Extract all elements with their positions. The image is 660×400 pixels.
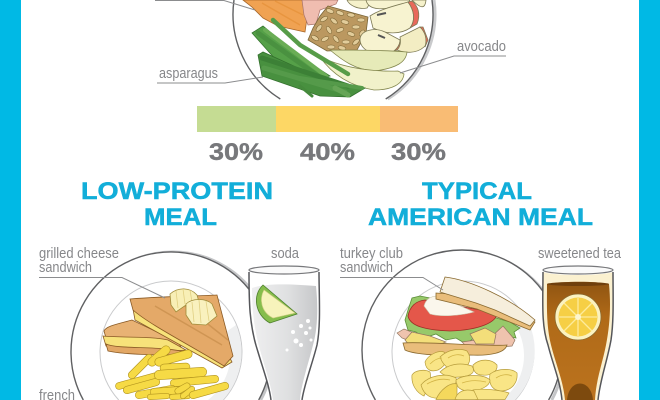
apple slices bbox=[347, 0, 428, 54]
percent: 40: 40% bbox=[300, 139, 355, 166]
asparagus bbox=[252, 20, 365, 97]
turkey club sandwich bbox=[397, 277, 535, 355]
heading: low-protein meal: MEAL bbox=[144, 204, 217, 231]
label: grilled cheese sandwich: grilled cheese bbox=[39, 246, 119, 262]
tea glass bbox=[543, 266, 613, 400]
heading: typical american meal: TYPICAL bbox=[422, 178, 532, 205]
soda bubbles bbox=[286, 319, 312, 352]
label: sweetened tea: sweetened tea bbox=[538, 246, 622, 262]
lemon slice bbox=[555, 294, 601, 340]
top label leader line bbox=[155, 0, 255, 10]
label: turkey club sandwich bbox=[340, 246, 443, 290]
grilled cheese sandwich bbox=[103, 289, 233, 368]
salmon bbox=[243, 0, 307, 32]
segment: yellow bbox=[276, 106, 380, 132]
heading: low-protein meal: LOW-PROTEIN bbox=[81, 178, 273, 205]
grain pile bbox=[308, 6, 368, 51]
high-protein plate illustration bbox=[233, 0, 435, 99]
label: asparagus: asparagus bbox=[159, 66, 218, 82]
percent: 30: 30% bbox=[209, 139, 263, 166]
heading: typical american meal: AMERICAN MEAL bbox=[368, 204, 593, 231]
bottom bread bbox=[403, 343, 507, 355]
label: soda: soda bbox=[271, 246, 300, 262]
lime wedge bbox=[256, 285, 297, 323]
lower sandwich half bbox=[103, 320, 188, 355]
heading: typical american meal bbox=[368, 178, 593, 231]
label: avocado bbox=[400, 39, 506, 73]
segment: orange bbox=[380, 106, 458, 132]
heading: low-protein meal bbox=[81, 178, 273, 231]
left blue side band bbox=[0, 0, 21, 400]
potato chips bbox=[412, 349, 517, 400]
tea base shadow bbox=[567, 384, 593, 400]
tomato bbox=[408, 300, 497, 331]
segment: green bbox=[197, 106, 276, 132]
avocado bbox=[320, 50, 407, 90]
butter curls bbox=[170, 289, 217, 325]
plate rim bbox=[233, 0, 435, 99]
label: turkey club sandwich: turkey club bbox=[340, 246, 403, 262]
right blue side band bbox=[639, 0, 660, 400]
percent: 30: 30% bbox=[391, 139, 446, 166]
mayo bbox=[424, 296, 474, 316]
top bread bbox=[436, 277, 535, 330]
french fries bbox=[119, 350, 225, 397]
soda glass bbox=[249, 266, 320, 400]
lettuce bbox=[405, 296, 520, 344]
label: grilled cheese sandwich bbox=[39, 246, 165, 298]
label: grilled cheese sandwich: sandwich bbox=[39, 260, 92, 276]
low-protein plate bbox=[71, 252, 273, 400]
upper sandwich half bbox=[130, 295, 233, 368]
label: turkey club sandwich: sandwich bbox=[340, 260, 393, 276]
typical american plate bbox=[362, 250, 564, 400]
turkey and cheese bbox=[397, 326, 515, 350]
label: avocado: avocado bbox=[457, 39, 506, 55]
ham bbox=[302, 0, 338, 25]
label: asparagus bbox=[157, 66, 263, 83]
macronutrient bar bbox=[197, 106, 458, 132]
